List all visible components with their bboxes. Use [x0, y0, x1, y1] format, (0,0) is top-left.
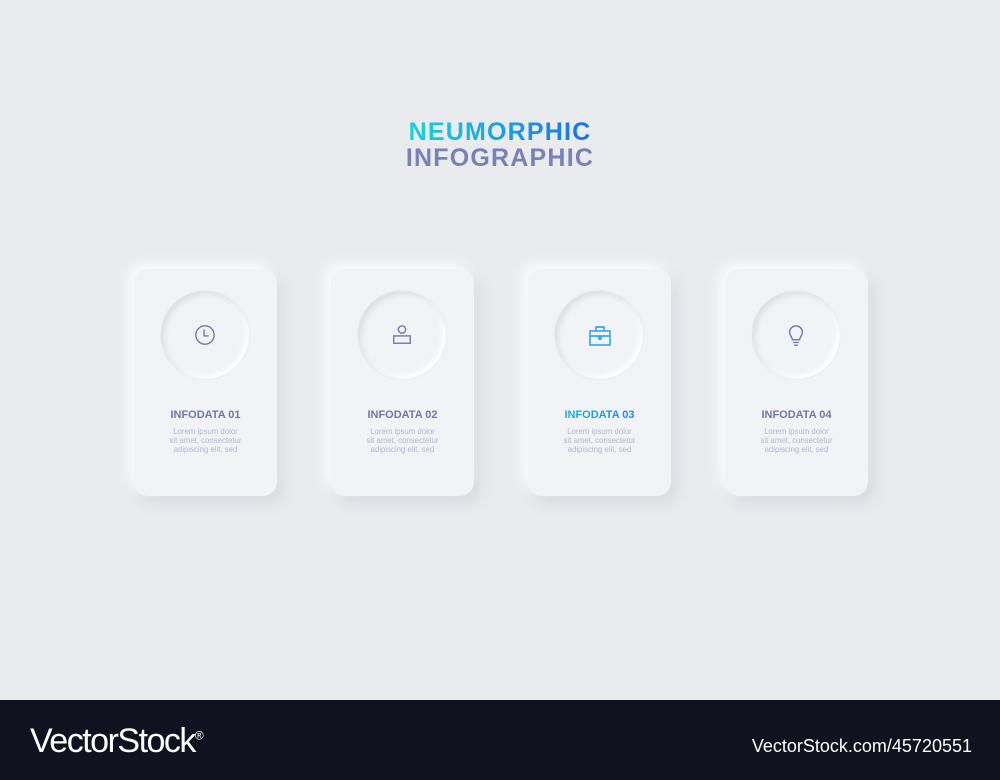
text 3: adipiscing elit, sed	[568, 445, 631, 454]
text 4	[760, 427, 832, 454]
card 2	[331, 269, 474, 496]
text 1: Lorem ipsum dolor	[173, 427, 238, 436]
footer bar	[0, 700, 1000, 780]
text 4: adipiscing elit, sed	[765, 445, 828, 454]
text 3: sit amet, consectetur	[564, 436, 635, 445]
footer logo: VectorStock®	[30, 722, 202, 760]
title: INFOGRAPHIC	[406, 144, 594, 172]
heading 2: INFODATA 02	[367, 409, 438, 421]
icon: person	[358, 291, 446, 379]
card 3	[528, 269, 671, 496]
title: NEUMORPHIC	[409, 118, 591, 146]
text 2: Lorem ipsum dolor	[370, 427, 435, 436]
text 1: adipiscing elit, sed	[174, 445, 237, 454]
icon: bulb	[752, 291, 840, 379]
text 1: sit amet, consectetur	[170, 436, 241, 445]
text 2: adipiscing elit, sed	[371, 445, 434, 454]
text 3	[564, 427, 636, 454]
text 3: Lorem ipsum dolor	[567, 427, 632, 436]
card 4	[725, 269, 868, 496]
text 1	[170, 427, 242, 454]
heading 3: INFODATA 03	[564, 409, 635, 421]
text 2: sit amet, consectetur	[367, 436, 438, 445]
card 1	[134, 269, 277, 496]
text 4: Lorem ipsum dolor	[764, 427, 829, 436]
icon: briefcase	[555, 291, 643, 379]
text 4: sit amet, consectetur	[761, 436, 832, 445]
heading 1: INFODATA 01	[170, 409, 241, 421]
heading 3	[528, 409, 671, 421]
footer id: VectorStock.com/45720551	[752, 736, 972, 756]
icon: clock	[161, 291, 249, 379]
text 2	[366, 427, 438, 454]
heading 4: INFODATA 04	[761, 409, 832, 421]
title	[406, 118, 594, 172]
